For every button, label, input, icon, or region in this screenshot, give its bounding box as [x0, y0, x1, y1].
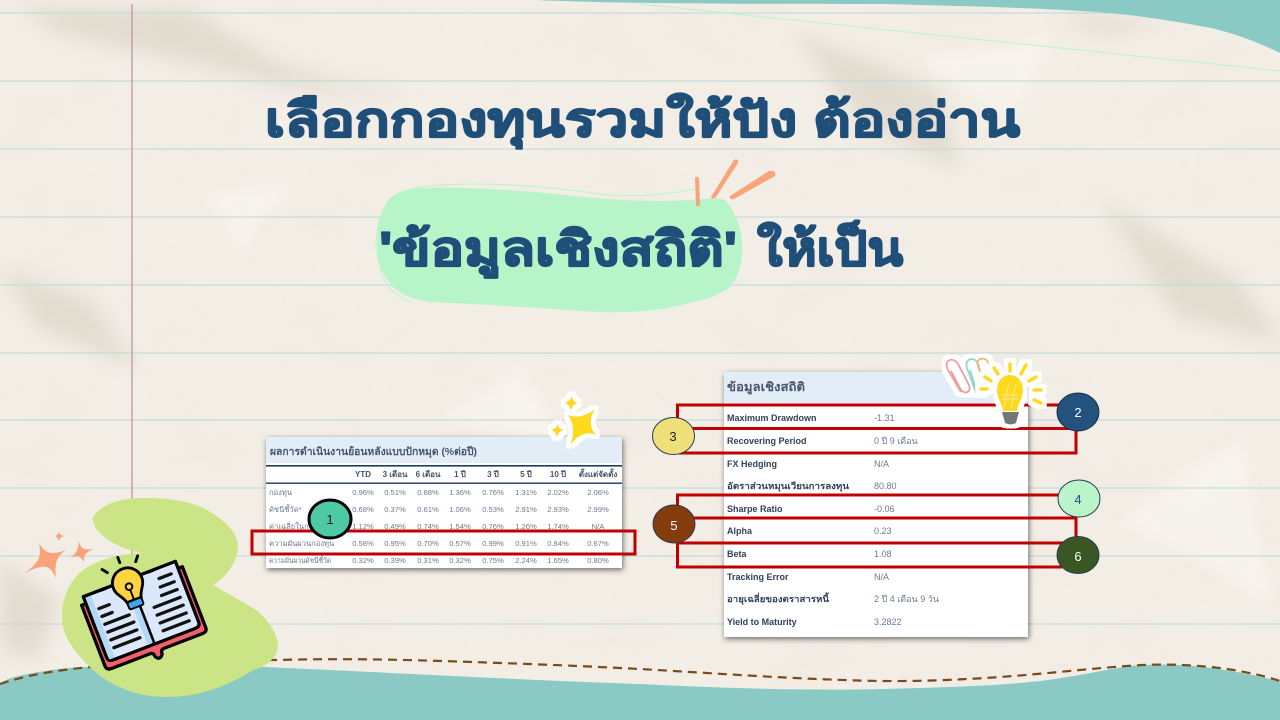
table column headers: 1 ปี [454, 469, 466, 479]
accent strokes [695, 159, 775, 206]
statistics heading: ข้อมูลเชิงสถิติ [727, 380, 805, 395]
table rows: 0.99% [482, 539, 504, 548]
table column headers [355, 468, 617, 479]
table column headers: YTD [355, 470, 371, 479]
panel: statistics table [724, 372, 1028, 637]
highlight box 1 [252, 531, 635, 554]
green blob behind book [62, 498, 278, 697]
statistics rows: 2 ปี 4 เดือน 9 วัน [874, 594, 939, 604]
statistics rows: -1.31 [874, 413, 895, 423]
statistics rows: -0.06 [874, 504, 895, 514]
callout 3: 3 [669, 429, 677, 444]
icon: paper clips [947, 359, 993, 393]
statistics rows: Yield to Maturity [727, 617, 797, 627]
callout 4 [1058, 480, 1100, 517]
table rows: ดัชนีชี้วัด* [269, 504, 302, 514]
highlight boxes 2 to 6 [675, 405, 1076, 567]
callout 6 [1057, 536, 1099, 574]
table rows: ค่าเฉลี่ยในกลุ่ม [269, 521, 318, 531]
table rows: 0.31% [417, 556, 439, 565]
statistics rows: N/A [874, 572, 889, 582]
table rows: 2.24% [515, 556, 537, 565]
table column headers: 10 ปี [550, 469, 566, 479]
table rows: 0.74% [417, 522, 439, 531]
table rows: 0.51% [384, 488, 406, 497]
table rows: 0.49% [384, 522, 406, 531]
table rows: 0.75% [482, 556, 504, 565]
table rows: 0.32% [449, 556, 471, 565]
table rows: 1.31% [515, 488, 537, 497]
table rows: 1.36% [449, 488, 471, 497]
table rows: 1.74% [547, 522, 569, 531]
table rows: 0.39% [384, 556, 406, 565]
table column headers: 6 เดือน [416, 469, 441, 479]
table rows: 0.96% [352, 488, 374, 497]
statistics rows: อัตราส่วนหมุนเวียนการลงทุน [727, 481, 850, 492]
table rows: 0.61% [417, 505, 439, 514]
statistics rows [727, 413, 939, 627]
statistics rows: 1.08 [874, 549, 892, 559]
table rows: 0.68% [417, 488, 439, 497]
table rows: 0.70% [417, 539, 439, 548]
panel: performance table [266, 437, 622, 568]
table column headers: 5 ปี [520, 469, 532, 479]
icon: orange sparkles [25, 532, 93, 578]
table heading: ผลการดำเนินงานย้อนหลังแบบปักหมุด (%ต่อปี) [270, 445, 477, 459]
callout 3 [652, 418, 694, 454]
statistics rows: Recovering Period [727, 436, 807, 446]
top teal wave [537, 0, 1280, 53]
statistics rows: Maximum Drawdown [727, 413, 817, 423]
table column headers: 3 ปี [487, 469, 499, 479]
icon: open book with bulb [79, 560, 210, 677]
table rows: 2.02% [547, 488, 569, 497]
statistics rows: FX Hedging [727, 459, 777, 469]
icon: light bulb [981, 364, 1041, 424]
margin line [131, 4, 133, 640]
callout 2: 2 [1074, 405, 1082, 420]
table rows: 0.95% [384, 539, 406, 548]
book cover [82, 567, 210, 677]
table column headers: 3 เดือน [383, 469, 408, 479]
table rows: 0.53% [482, 505, 504, 514]
table rows: 0.80% [587, 556, 609, 565]
table rows: 0.58% [352, 539, 374, 548]
table column headers: ตั้งแต่จัดตั้ง [579, 468, 617, 479]
table rows: 0.68% [352, 505, 374, 514]
callout 5: 5 [670, 518, 678, 533]
callout 5 [653, 505, 695, 543]
callout 2 [1057, 393, 1099, 431]
callout 1: 1 [326, 512, 334, 527]
table rows: 2.91% [515, 505, 537, 514]
statistics rows: 80.80 [874, 481, 897, 491]
table rows: 1.54% [449, 522, 471, 531]
icon: idea bulb on book [91, 547, 163, 617]
callout 6: 6 [1074, 549, 1082, 564]
text lines [97, 574, 189, 649]
table rows: 0.32% [352, 556, 374, 565]
table rows: 0.91% [515, 539, 537, 548]
title line 1: เลือกกองทุนรวมให้ปัง ต้องอ่าน [265, 92, 1020, 149]
statistics rows: N/A [874, 459, 889, 469]
highlight blob [376, 184, 742, 312]
title line 2: tail: ให้เป็น [757, 219, 903, 275]
thin green swoosh [640, 4, 1280, 71]
table rows: 0.57% [449, 539, 471, 548]
table rows: 1.65% [547, 556, 569, 565]
callout 1 [309, 500, 351, 538]
icon: sparkles [551, 395, 596, 445]
statistics rows: 0.23 [874, 526, 892, 536]
table rows: 0.76% [482, 488, 504, 497]
statistics rows: 0 ปี 9 เดือน [874, 436, 918, 446]
table rows: N/A [592, 522, 605, 531]
dashed stitch line [0, 659, 1280, 684]
table rows: 0.84% [547, 539, 569, 548]
title line 2: highlighted phrase: 'ข้อมูลเชิงสถิติ' [379, 222, 737, 279]
table rows: 0.76% [482, 522, 504, 531]
table rows: ความผันผวนกองทุน [269, 539, 334, 548]
book pages [83, 579, 154, 662]
statistics rows: 3.2822 [874, 617, 902, 627]
table rows: 0.37% [384, 505, 406, 514]
table rows: 1.06% [449, 505, 471, 514]
table rows: 2.93% [547, 505, 569, 514]
bottom teal wave [0, 665, 1280, 720]
table rows: 0.67% [587, 539, 609, 548]
table rows: กองทุน [269, 488, 292, 497]
table rows: 2.99% [587, 505, 609, 514]
statistics rows: Sharpe Ratio [727, 504, 783, 514]
statistics rows: Alpha [727, 526, 753, 536]
table rows: 1.26% [515, 522, 537, 531]
statistics rows: Beta [727, 549, 748, 559]
callout 4: 4 [1074, 492, 1082, 507]
table rows [269, 488, 609, 565]
table rows: 2.06% [587, 488, 609, 497]
table rows: ความผันผวนดัชนีชี้วัด [269, 555, 331, 565]
title block [265, 92, 1020, 312]
statistics rows: Tracking Error [727, 572, 789, 582]
statistics rows: อายุเฉลี่ยของตราสารหนี้ [727, 592, 830, 605]
table rows: 1.12% [352, 522, 374, 531]
